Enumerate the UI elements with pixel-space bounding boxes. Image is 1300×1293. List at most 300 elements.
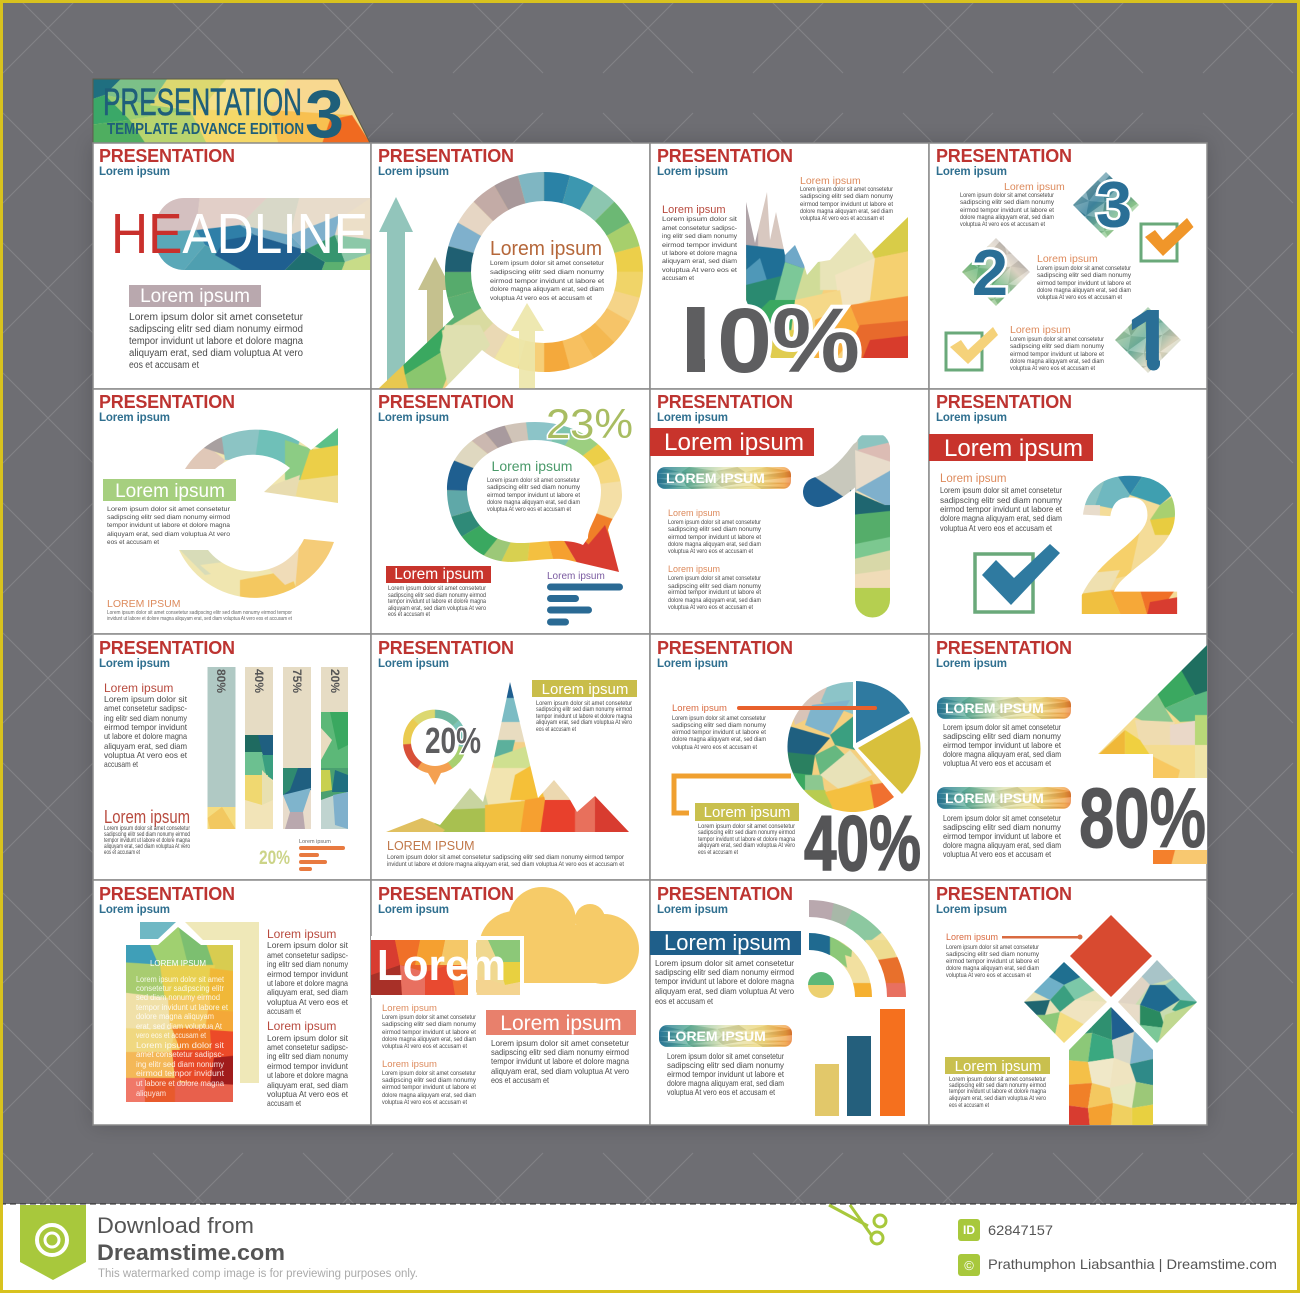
text block [943,723,1062,768]
step 3: 3 [1096,168,1132,241]
download text: This watermarked comp image is for previewing purposes only. [98,1268,418,1280]
panel: peak chart slide: Lorem ipsum [378,658,449,670]
text block: tempor invidunt ut labore et dolore magna [949,1089,1047,1095]
diamond: left [1024,962,1107,1043]
step 1 text: dolore magna aliquyam erat, sed diam [1010,358,1104,365]
text block: voluptua At vero eos et [267,1090,349,1099]
step 3 text: sadipscing elitr sed diam nonumy [960,199,1055,206]
pin with 20 percent [403,710,481,785]
note text: Lorem ipsum dolor sit amet consetetur [104,826,190,832]
label: Lorem ipsum [542,681,628,698]
text block: tempor invidunt ut labore et dolore magna [491,1057,629,1066]
panel: cloud slide [371,880,650,1125]
text block: eirmod tempor invidunt ut labore et [940,505,1063,514]
step 1: 1 [1126,293,1174,389]
mini bar chart: Lorem ipsum [547,571,605,582]
step 3 [1073,168,1139,241]
footer text: LOREM IPSUM [387,839,475,853]
footnote: Lorem ipsum dolor sit amet consetetur sadipscing elitr sed diam nonumy eirmod tempor [107,610,292,616]
panel: up arrow slide: Lorem ipsum [936,658,1007,670]
text block: sadipscing elitr sed diam nonumy [382,1078,476,1084]
icon: yellow check [946,327,998,370]
body text: tempor invidunt ut labore et dolore magna [129,336,304,347]
text block: Lorem ipsum dolor sit amet consetetur [943,723,1061,732]
icon: signal arcs [808,900,906,998]
text block right: eirmod tempor invidunt ut labore et [800,201,893,208]
panel: headline slide: Lorem ipsum [99,166,170,178]
step 1 text: voluptua At vero eos et accusam et [1010,365,1095,372]
body text: aliquyam erat, sed diam voluptua At vero [388,606,487,612]
text block: voluptua At vero eos et [104,751,188,760]
panel: bar columns slide: Lorem ipsum [99,658,170,670]
panel: clipboard slide [93,880,371,1125]
40 percent: 40% [804,799,921,887]
panel: diamonds slide [929,880,1207,1125]
pill one: LOREM IPSUM [945,700,1044,716]
text block [267,927,349,1016]
header tab: PRESENTATION [103,82,302,124]
pill one [937,697,1071,719]
text block: sadipscing elitr sed diam nonumy [382,1022,476,1028]
text block [491,1039,629,1085]
footer text: Lorem ipsum dolor sit amet consetetur sadipscing elitr sed diam nonumy eirmod tempor [387,855,624,861]
text block right [800,175,894,222]
big number [687,304,862,373]
text block right: voluptua At vero eos et accusam et [800,215,884,222]
headline banner: HEADLINE [111,202,368,266]
author credit: Prathumphon Liabsanthia | Dreamstime.com [988,1256,1277,1272]
clipboard: ut labore et dolore magna [136,1079,225,1088]
panel: number two slide: PRESENTATION [936,392,1072,412]
image id: ID [963,1223,975,1237]
clipboard: ing elitr sed diam nonumy [136,1060,224,1069]
text block: dolore magna aliquyam erat, sed diam [668,598,761,604]
author credit [958,1254,1277,1276]
text block: aliquyam erat, sed diam voluptua At vero [491,1067,629,1076]
note text: tempor invidunt ut labore et dolore magna [104,838,191,844]
step 3 text: dolore magna aliquyam erat, sed diam [960,214,1054,221]
text block right: sadipscing elitr sed diam nonumy [800,193,894,200]
icon: scissors [829,1205,886,1244]
ring text: voluptua At vero eos et accusam et [490,295,592,302]
text block [267,1019,349,1108]
arrow: pale yellow [511,303,544,389]
text block [104,681,188,769]
arrow: olive [418,257,452,350]
panel: pie chart slide: Lorem ipsum [657,658,728,670]
text block: ut labore et dolore magna [267,1071,348,1080]
step 3 text: eirmod tempor invidunt ut labore et [960,207,1054,214]
body text: eos et accusam et [388,612,430,618]
panel: 10 percent slide: Lorem ipsum [657,166,728,178]
text block: eos et accusam et [698,850,738,856]
bubble text: sadipscing elitr sed diam nonumy [487,485,580,491]
text block left: accusam et [662,275,694,282]
header tab: 3 [305,76,344,152]
step 1 [1115,307,1181,373]
panel: 10 percent slide [650,143,929,392]
blue label: Lorem ipsum [664,930,791,955]
bubble text: eirmod tempor invidunt ut labore et [487,493,580,499]
text block: sadipscing elitr sed diam nonumy eirmod [949,1083,1046,1089]
text block: Lorem ipsum dolor sit [267,1034,349,1043]
mini bars: Lorem ipsum [299,839,331,845]
text block: Lorem ipsum dolor sit amet consetetur [382,1071,476,1077]
step 1 text: eirmod tempor invidunt ut labore et [1010,351,1104,358]
column chart: 20% [328,669,342,693]
text block: dolore magna aliquyam erat, sed diam [667,1079,784,1088]
text block left: Lorem ipsum dolor sit [662,216,737,223]
download text: Dreamstime.com [97,1240,285,1265]
text block: sadipscing elitr sed diam nonumy [940,496,1063,505]
callout [946,932,1082,979]
step 2 text [1037,253,1132,301]
text block: eirmod tempor invidunt [104,723,188,732]
panel: pie chart slide: PRESENTATION [657,638,793,658]
body text: sadipscing elitr sed diam nonumy eirmod [388,593,486,599]
panel: diamonds slide: PRESENTATION [936,884,1072,904]
text block right: dolore magna aliquyam erat, sed diam [800,208,893,215]
panel: bar columns slide: PRESENTATION [99,638,235,658]
text block: dolore magna aliquyam erat, sed diam [382,1093,476,1099]
bubble text: dolore magna aliquyam erat, sed diam [487,500,580,506]
download text [97,1213,418,1280]
body text: eos et accusam et [107,539,159,546]
text block: accusam et [267,1099,302,1108]
step 3 text: voluptua At vero eos et accusam et [960,221,1045,228]
clipboard: tempor invidunt ut labore et [136,1003,229,1012]
callout: eirmod tempor invidunt ut labore et [946,959,1039,965]
text block: Lorem ipsum dolor sit amet consetetur [668,520,761,526]
text block: Lorem ipsum dolor sit amet consetetur [668,576,761,582]
callout: dolore magna aliquyam erat, sed diam [946,966,1039,972]
image id: 62847157 [988,1222,1053,1238]
clipboard: sed diam nonumy eirmod [136,993,220,1002]
author credit: © [964,1258,974,1273]
column chart: 75% [290,669,304,693]
panel: speech bubble slide: PRESENTATION [378,392,514,412]
diamond: right [1118,960,1197,1043]
clipboard: Lorem ipsum dolor sit amet [136,975,225,984]
text block left: eirmod tempor invidunt [662,242,737,249]
step 2 text: Lorem ipsum dolor sit amet consetetur [1037,265,1132,272]
text block: Lorem ipsum dolor sit [104,695,188,704]
panel: cloud slide: PRESENTATION [378,884,514,904]
ring text: sadipscing elitr sed diam nonumy [490,269,605,276]
mountain chart [746,192,908,358]
ring text: Lorem ipsum [490,238,602,260]
gradient pill: LOREM IPSUM [667,1028,766,1044]
body text: aliquyam erat, sed diam voluptua At vero [129,348,304,359]
label: Lorem ipsum [115,481,225,502]
panel: number one slide: Lorem ipsum [657,412,728,424]
note text: eos et accusam et [104,850,140,856]
text block: aliquyam erat, sed diam voluptua At vero [536,720,633,726]
step 1 text: Lorem ipsum [1010,324,1071,336]
footnote [107,598,293,622]
gradient pill [659,1025,792,1047]
panel: pie chart slide [650,634,929,887]
ring text: dolore magna aliquyam erat, sed diam [490,286,604,293]
text block right: Lorem ipsum [800,175,861,187]
text block: sadipscing elitr sed diam nonumy eirmod [698,830,795,836]
download text: Download from [97,1213,254,1238]
callout top: voluptua At vero eos et accusam et [672,745,757,751]
lorem banner: Lorem [377,941,506,990]
panel: signal and bars slide: Lorem ipsum [657,904,728,916]
note text: aliquyam erat, sed diam voluptua At vero [104,844,191,850]
step 2 text: voluptua At vero eos et accusam et [1037,294,1122,301]
step 2 [962,236,1030,309]
step 2 text: eirmod tempor invidunt ut labore et [1037,280,1131,287]
footer strip [0,1204,1300,1293]
text block: Lorem ipsum [382,1003,437,1014]
text block: sadipscing elitr sed diam nonumy [668,527,761,533]
footer text: invidunt ut labore et dolore magna aliquyam erat, sed diam voluptua At vero eos et accusam et [387,862,624,868]
pie chart [787,681,921,812]
footer text [387,839,624,868]
note text [104,807,191,856]
text block [655,959,794,1006]
text block: eirmod tempor invidunt ut labore et [943,832,1062,841]
arrow: up house [1069,1007,1153,1125]
text block: accusam et [267,1007,302,1016]
gradient pill: LOREM IPSUM [666,470,765,486]
clipboard: eirmod tempor invidunt [136,1069,225,1078]
text block: voluptua At vero eos et accusam et [943,759,1052,768]
panel: speech bubble slide [371,389,650,634]
text block: dolore magna aliquyam erat, sed diam [668,542,761,548]
text block [943,814,1062,859]
panel: speech bubble slide: Lorem ipsum [378,412,449,424]
text block: eirmod tempor invidunt ut labore et [382,1030,476,1036]
mini bar chart [547,571,623,626]
text block: dolore magna aliquyam erat, sed diam [940,514,1062,523]
step 2 text: dolore magna aliquyam erat, sed diam [1037,287,1131,294]
text block: accusam et [104,760,139,769]
panel: number two slide [929,389,1207,656]
panel: up arrow slide [929,634,1207,880]
text block [382,1059,476,1106]
callout top: sadipscing elitr sed diam nonumy [672,723,766,729]
text block: Lorem ipsum [940,473,1006,485]
note text: Lorem ipsum [104,807,190,827]
text block: voluptua At vero eos et accusam et [668,549,753,555]
pale corner shape [185,922,259,1083]
text block [949,1077,1047,1109]
bar chart [815,1009,905,1116]
step 2 text: sadipscing elitr sed diam nonumy [1037,272,1132,279]
clipboard: dolore magna aliquyam [136,1012,214,1021]
text block: ut labore et dolore magna [267,979,348,988]
mini bars [299,839,345,871]
text block: dolore magna aliquyam erat, sed diam [943,750,1061,759]
text block right: Lorem ipsum dolor sit amet consetetur [800,186,894,193]
step 1 text [1010,324,1105,372]
bracket [674,776,791,813]
big number: 0% [717,290,860,392]
callout: sadipscing elitr sed diam nonumy [946,952,1039,958]
callout top [672,703,877,751]
panel: magnifier slide [371,143,650,389]
bubble text: Lorem ipsum [492,458,572,474]
callout: Lorem ipsum [946,932,998,942]
diamond: red [1070,915,1152,997]
text block: voluptua At vero eos et accusam et [382,1044,467,1050]
text block [940,473,1063,533]
text block: voluptua At vero eos et accusam et [667,1088,776,1097]
panel: cycle slide: Lorem ipsum [99,412,170,424]
panel: clipboard slide: PRESENTATION [99,884,235,904]
pill two: LOREM IPSUM [945,790,1044,806]
text block: eos et accusam et [536,727,576,733]
icon: download badge [20,1205,86,1280]
speech bubble ring [447,422,622,572]
text block: aliquyam erat, sed diam voluptua At vero [655,987,794,996]
sheet of slides [93,143,1207,1125]
ring text: Lorem ipsum dolor sit amet consetetur [490,260,605,267]
callout: voluptua At vero eos et accusam et [946,973,1031,979]
text block: Lorem ipsum dolor sit amet consetetur [698,824,795,830]
label: Lorem ipsum [704,804,790,821]
body text: tempor invidunt ut labore et dolore magna [107,522,230,529]
panel: magnifier slide: Lorem ipsum [378,166,449,178]
callout: Lorem ipsum dolor sit amet consetetur [946,945,1039,951]
panel: diamonds slide: Lorem ipsum [936,904,1007,916]
clipboard: amet consetetur sadipsc- [136,1050,224,1059]
cycle arrow bottom [179,539,334,598]
salmon label: Lorem ipsum [500,1012,622,1035]
text block: aliquyam erat, sed diam [104,742,187,751]
big number: 1 [667,290,718,392]
clipboard: Lorem ipsum dolor sit [136,1041,225,1050]
panel: headline slide: PRESENTATION [99,146,235,166]
header tab: TEMPLATE ADVANCE EDITION [107,121,304,138]
text block: voluptua At vero eos et accusam et [940,524,1053,533]
text block: sadipscing elitr sed diam nonumy [943,823,1062,832]
text block: sadipscing elitr sed diam nonumy eirmod [655,968,794,977]
text block left: Lorem ipsum [662,204,726,216]
clipboard: erat, sed diam voluptua At [136,1022,223,1031]
body text: sadipscing elitr sed diam nonumy eirmod [107,514,230,521]
panel: signal and bars slide: PRESENTATION [657,884,793,904]
text block: Lorem ipsum dolor sit amet consetetur [667,1052,784,1061]
body text [107,506,231,546]
icon: orange check [1141,218,1194,261]
cycle arrow top [185,428,338,503]
text block left: ing elitr sed diam nonumy [662,233,738,240]
text block: tempor invidunt ut labore et dolore magna [655,977,794,986]
bubble text: Lorem ipsum dolor sit amet consetetur [487,478,580,484]
pin with 20 percent: 20% [425,720,481,761]
panel: peak chart slide [371,634,650,880]
text block: Lorem ipsum [267,927,336,941]
text block: Lorem ipsum dolor sit [267,941,349,950]
step 2: 2 [972,236,1008,309]
big numeral 1 [803,435,890,618]
bubble text [487,458,580,513]
text block: voluptua At vero eos et accusam et [382,1100,467,1106]
text block: amet consetetur sadipsc- [104,704,187,713]
text block: Lorem ipsum dolor sit amet consetetur [949,1077,1046,1083]
red label: Lorem ipsum [944,435,1083,462]
footnote: invidunt ut labore et dolore magna aliquyam erat, sed diam voluptua At vero eos et accusam et [107,616,293,622]
text block: ing elitr sed diam nonumy [267,1052,349,1061]
text block: Lorem ipsum [668,564,720,574]
step 3 text: Lorem ipsum dolor sit amet consetetur [960,192,1055,199]
column chart: 40% [252,669,266,693]
text block: sadipscing elitr sed diam nonumy [667,1061,785,1070]
text block: aliquyam erat, sed diam [267,1081,348,1090]
image id [958,1219,1053,1241]
bubble text: voluptua At vero eos et accusam et [487,507,571,513]
body text: Lorem ipsum dolor sit amet consetetur [107,506,231,513]
big arrow [1098,645,1207,864]
text block: eirmod tempor invidunt [267,970,349,979]
text block [668,508,761,555]
panel: signal and bars slide [650,880,929,1125]
text block: Lorem ipsum dolor sit amet consetetur [940,486,1062,495]
text block: sadipscing elitr sed diam nonumy eirmod [491,1048,629,1057]
clipboard: LOREM IPSUM [150,959,206,968]
body text: eos et accusam et [129,360,199,371]
text block: voluptua At vero eos et accusam et [668,605,753,611]
text block: aliquyam erat, sed diam voluptua At vero [698,843,796,849]
text block: eos et accusam et [655,997,714,1006]
text block: eirmod tempor invidunt ut labore et [943,741,1062,750]
note text: sadipscing elitr sed diam nonumy eirmod [104,832,190,838]
text block: sadipscing elitr sed diam nonumy [943,732,1062,741]
text block: Lorem ipsum dolor sit amet consetetur [655,959,794,968]
text block: eirmod tempor invidunt ut labore et [382,1085,476,1091]
label: Lorem ipsum [140,286,250,307]
text block: amet consetetur sadipsc- [267,1043,348,1052]
pill two [937,787,1071,809]
text block left: amet consetetur sadipsc- [662,225,737,232]
callout top: eirmod tempor invidunt ut labore et [672,730,766,736]
23 percent: 23% [546,400,633,447]
text block: Lorem ipsum [382,1059,437,1070]
text block: eirmod tempor invidunt ut labore et [668,590,761,596]
text block: tempor invidunt ut labore et dolore magna [536,714,633,720]
body text: aliquyam erat, sed diam voluptua At vero [107,531,230,538]
text block: Lorem ipsum [267,1019,336,1033]
callout top: dolore magna aliquyam erat, sed diam [672,737,766,743]
text block left: aliquyam erat, sed diam [662,258,737,265]
ring text [490,238,605,302]
body text: sadipscing elitr sed diam nonumy eirmod [129,324,303,335]
text block: aliquyam erat, sed diam voluptua At vero [949,1096,1047,1102]
text block [382,1003,476,1050]
clipboard: consetetur sadipscing elitr [136,984,224,993]
text block: aliquyam erat, sed diam [267,988,348,997]
text block: Lorem ipsum dolor sit amet consetetur [382,1015,476,1021]
clipboard: aliquyam [136,1089,166,1098]
panel: clipboard slide: Lorem ipsum [99,904,170,916]
body text [129,312,304,371]
text block: eos et accusam et [949,1103,989,1109]
step 1 text: sadipscing elitr sed diam nonumy [1010,343,1105,350]
peak chart [386,682,629,832]
arrow: tall teal [379,197,413,389]
step 3 text: Lorem ipsum [1004,181,1065,193]
teal tab [140,922,176,939]
panel: number one slide: PRESENTATION [657,392,793,412]
body text: Lorem ipsum dolor sit amet consetetur [129,312,304,323]
text block: tempor invidunt ut labore et dolore magna [698,837,796,843]
text block: ut labore et dolore magna [104,732,187,741]
text block: Lorem ipsum [668,508,720,518]
